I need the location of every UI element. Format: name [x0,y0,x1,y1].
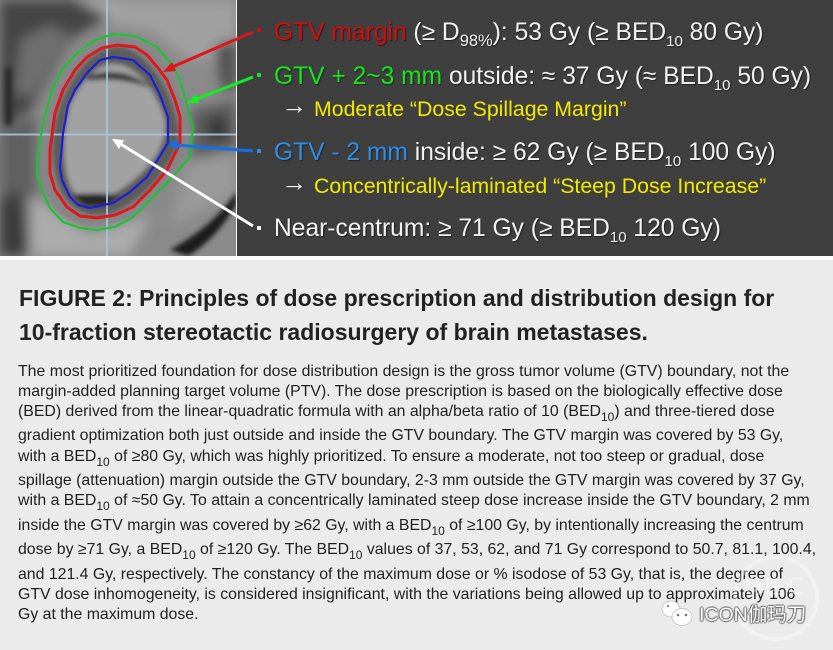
text: GTV plus margin: GTV + 2~3 mm outside: ≈ 37 Gy (≈ BED10 50 Gy) [274,63,811,94]
contour: red [50,45,180,218]
body text: inside the GTV margin was covered by ≥62 Gy, with a BED10 of ≥100 Gy, by intentionally increasing the centrum [18,517,804,538]
body text: and 121.4 Gy, respectively. The constancy of the maximum dose or % isodose of 53 Gy, that is, the degree of [18,566,783,583]
text: steep dose increase: → [281,167,307,197]
body text: Gy at the maximum dose. [18,606,199,623]
body text: dose by ≥71 Gy, a BED10 of ≥120 Gy. The BED10 values of 37, 53, 62, and 71 Gy correspond to 50.7, 81.1, 100.4, [18,541,816,562]
heading: FIGURE 2: Principles of dose prescription and distribution design for [19,285,774,311]
watermark faint label: 脉医汇 [746,577,803,598]
contour: green [37,34,193,230]
body text: (BED) derived from the linear-quadratic formula with an alpha/beta ratio of 10 (BED10) and three-tiered dose [18,403,775,424]
text: dose spillage margin: Moderate “Dose Spillage Margin” [314,97,626,121]
contour: blue [60,57,168,208]
watermark text: ICON伽玛刀 [699,604,806,626]
text: near-centrum: Near-centrum: ≥ 71 Gy (≥ BED10 120 Gy) [274,215,721,246]
crosshair [0,0,236,256]
heading: 10-fraction stereotactic radiosurgery of brain metastases. [19,319,648,345]
body text: The most prioritized foundation for dose distribution design is the gross tumor volume (GTV) boundary, not the [18,363,789,380]
watermark circle [733,555,819,641]
divider [236,0,238,257]
icon: chat bubbles [662,600,692,626]
body text: with a BED10 of ≥80 Gy, which was highly prioritized. To ensure a moderate, not too steep or gradual, dose [18,448,764,469]
body text: with a BED10 of ≈50 Gy. To attain a concentrically laminated steep dose increase inside the GTV boundary, 2 mm [18,492,810,513]
text: GTV margin: GTV margin (≥ D98%): 53 Gy (≥ BED10 80 Gy) [274,19,763,50]
bullet markers [257,28,261,230]
body text: spillage (attenuation) margin outside the GTV boundary, 2-3 mm outside the GTV margin was covered by 37 Gy, [18,472,805,489]
panel: caption [0,260,833,650]
arrow: blue [168,140,253,151]
arrow: white [112,139,253,226]
body text: GTV dose inhomogeneity, is considered insignificant, with the variations being allowed up to approximately 106 [18,586,795,603]
panel: dose annotations [237,0,833,256]
text: steep dose increase: Concentrically-laminated “Steep Dose Increase” [314,174,766,198]
arrow: green [187,77,253,103]
body text [18,363,816,623]
panel: MRI scan with contours [0,0,236,256]
arrows [112,30,254,228]
body text: gradient optimization both just outside and inside the GTV boundary. The GTV margin was covered by 53 Gy, [18,427,783,444]
text: dose spillage margin: → [281,90,307,120]
body text: margin-added planning target volume (PTV). The dose prescription is based on the biologically effective dose [18,383,783,400]
arrow: red [163,32,253,72]
text: GTV minus margin: GTV - 2 mm inside: ≥ 62 Gy (≥ BED10 100 Gy) [274,139,776,170]
watermark [662,570,806,626]
heading [19,285,774,345]
